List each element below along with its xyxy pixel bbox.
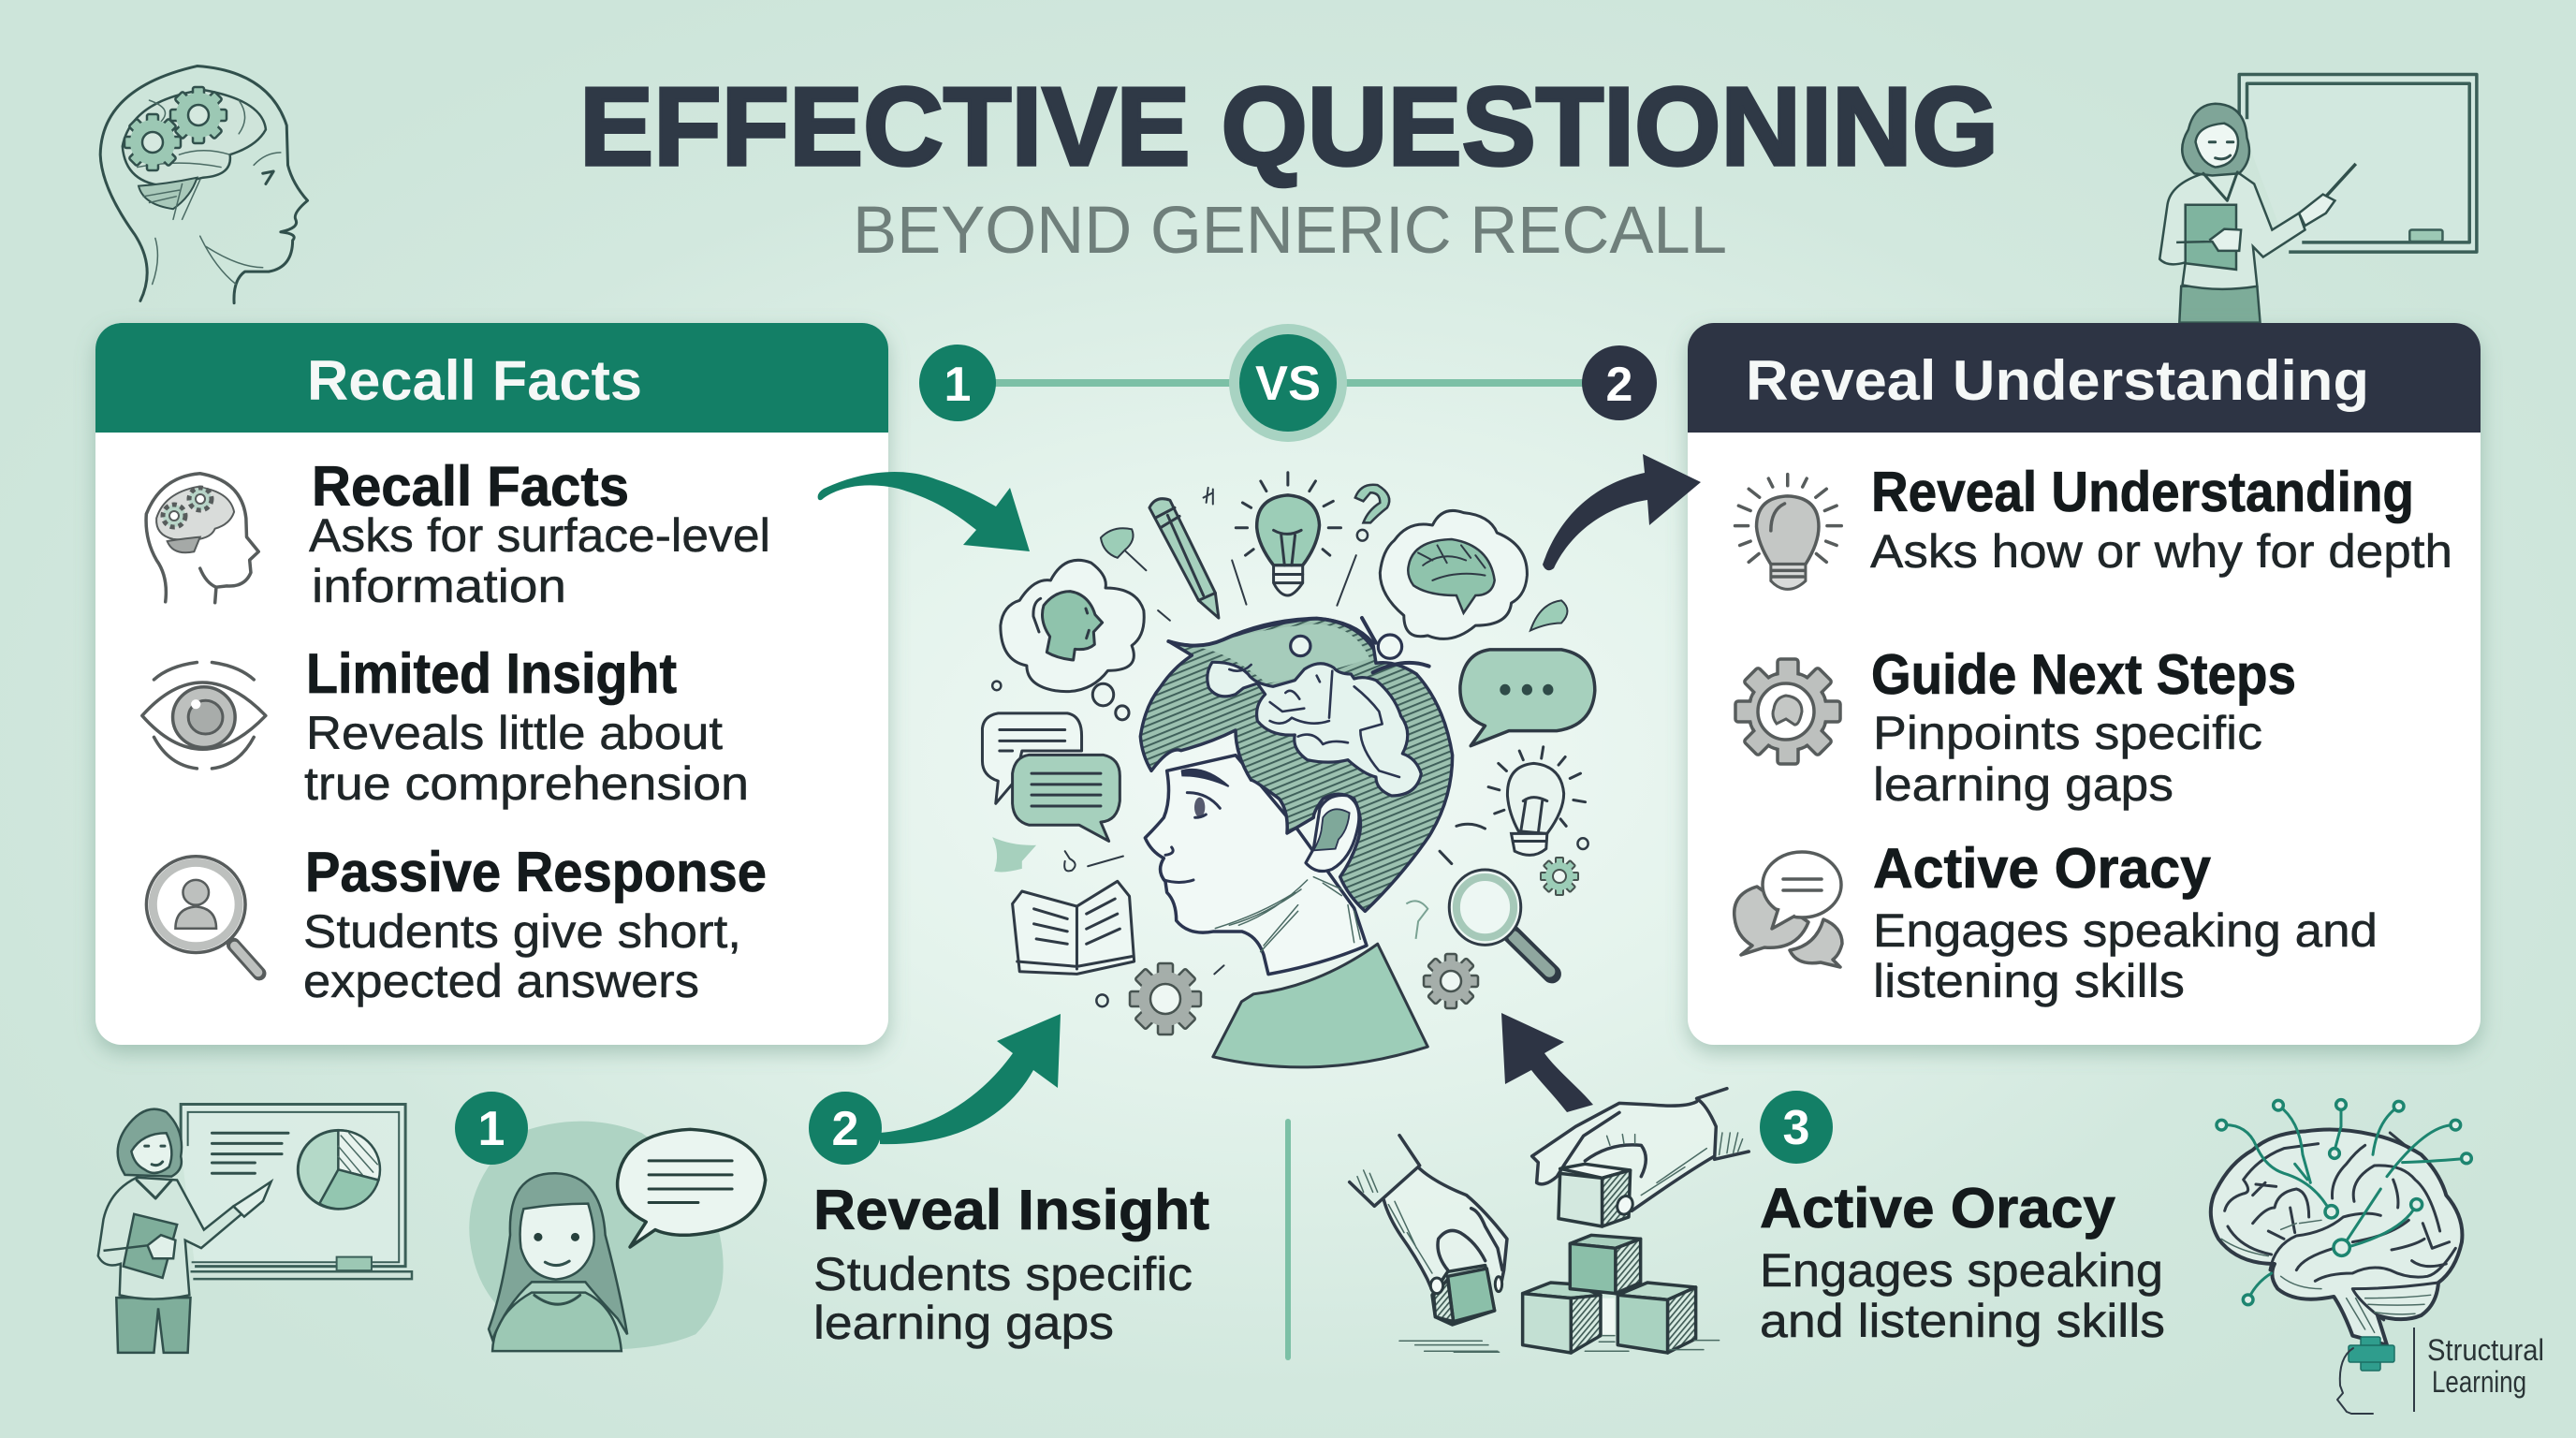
badge 2 — [809, 1092, 882, 1165]
logo mark — [2337, 1337, 2394, 1414]
icon: eye — [142, 662, 266, 769]
item text: Engages speaking and — [1873, 904, 2378, 957]
illustration: brain with circuit nodes — [2211, 1100, 2471, 1345]
text: Students specific — [813, 1248, 1193, 1300]
icon: speech bubbles — [1734, 852, 1842, 967]
icon: magnifier with person — [146, 857, 259, 974]
icon: head silhouette in cloud — [1033, 592, 1103, 660]
item text: information — [312, 560, 566, 612]
illustration: head with brain and gears — [100, 66, 308, 303]
speech bubble with dots — [1460, 650, 1595, 746]
item text — [309, 509, 770, 612]
badge VS: VS — [1255, 357, 1321, 411]
badge 1: 1 — [478, 1102, 505, 1156]
speech bubble — [618, 1129, 766, 1247]
text: Engages speaking — [1760, 1244, 2163, 1297]
item text — [1873, 707, 2262, 811]
item text: expected answers — [303, 955, 699, 1007]
item text: listening skills — [1873, 955, 2185, 1007]
boy: brain — [1208, 662, 1421, 796]
heading: Active Oracy — [1760, 1177, 2116, 1240]
item text: true comprehension — [304, 757, 749, 810]
panel: recall facts — [95, 323, 888, 1045]
item title: Guide Next Steps — [1871, 643, 2296, 706]
logo text — [2427, 1333, 2544, 1399]
boy: eye and details — [1182, 770, 1229, 786]
doodles — [1124, 488, 1356, 621]
badge 1: 1 — [944, 358, 971, 412]
item text: Students give short, — [303, 905, 741, 958]
boy: head — [1140, 618, 1453, 975]
icon: open book — [1013, 881, 1134, 974]
speech bubbles left — [982, 713, 1082, 803]
item text: Pinpoints specific — [1873, 707, 2262, 759]
heading: Reveal Understanding — [1746, 349, 2369, 412]
item: reveal understanding — [1735, 461, 2452, 589]
badge 2 — [1582, 345, 1657, 420]
blob background — [469, 1122, 724, 1350]
card header — [95, 323, 888, 433]
item text — [1873, 904, 2378, 1007]
panel: reveal understanding — [1688, 323, 2481, 1045]
logo text: Learning — [2432, 1365, 2526, 1399]
badge 3: 3 — [1783, 1101, 1809, 1155]
hand right with block — [1532, 1089, 1749, 1226]
text — [813, 1248, 1193, 1349]
badge VS — [1229, 324, 1347, 442]
icon: light bulb top — [1257, 495, 1320, 565]
item: active oracy — [1734, 837, 2378, 1007]
item text — [304, 707, 749, 810]
stacked blocks — [1399, 1235, 1720, 1353]
item text: learning gaps — [1873, 758, 2174, 811]
item text: Asks how or why for depth — [1870, 525, 2452, 578]
block: active oracy — [1760, 1091, 2165, 1347]
illustration: hands stacking blocks — [1350, 1089, 1749, 1353]
text: learning gaps — [813, 1297, 1114, 1349]
item: guide next steps — [1735, 643, 2296, 811]
item: limited insight — [142, 642, 749, 810]
cloud: left — [1001, 560, 1144, 692]
versus connector — [919, 324, 1657, 442]
item title: Reveal Understanding — [1871, 461, 2414, 523]
text: and listening skills — [1760, 1295, 2165, 1347]
card background — [1688, 323, 2481, 1045]
illustration: central student with ideas — [982, 473, 1595, 1067]
boy: ear — [1306, 795, 1359, 872]
title: EFFECTIVE QUESTIONING — [579, 65, 1998, 189]
icon: head with gears — [146, 474, 258, 603]
item text: Reveals little about — [306, 707, 723, 759]
block: reveal insight — [809, 1092, 1209, 1349]
heading: Reveal Insight — [813, 1179, 1209, 1241]
arrow: green from badge 2 into centre — [880, 1014, 1061, 1144]
item title: Passive Response — [305, 841, 767, 903]
gears — [1130, 858, 1578, 1034]
icon: gear — [1735, 659, 1840, 764]
illustration: teacher with pie chart — [98, 1104, 412, 1353]
icon: light bulb — [1735, 475, 1841, 589]
icon: pencil — [1149, 499, 1219, 618]
girl — [489, 1173, 627, 1351]
icon: question mark — [1355, 485, 1389, 522]
item: passive response — [146, 841, 767, 1007]
group: student speaking — [455, 1092, 766, 1351]
hand left — [1350, 1136, 1507, 1325]
heading: Recall Facts — [307, 349, 642, 412]
card background — [95, 323, 888, 1045]
logo: structural learning — [2337, 1328, 2544, 1414]
arrow: green into centre from top-left — [818, 472, 1030, 551]
illustration: teacher at whiteboard — [2159, 74, 2477, 323]
card header — [1688, 323, 2481, 433]
icon: small bulb right — [1507, 763, 1564, 833]
badge 2: 2 — [1606, 358, 1632, 412]
vertical divider — [1285, 1122, 1291, 1357]
text — [1760, 1244, 2165, 1347]
boy: shirt — [1213, 944, 1427, 1067]
badge 1 — [919, 345, 996, 421]
item title: Recall Facts — [312, 455, 629, 518]
logo text: Structural — [2427, 1333, 2544, 1367]
arrow: dark from blocks into centre — [1501, 1013, 1593, 1112]
item title: Limited Insight — [306, 642, 677, 705]
item title: Active Oracy — [1873, 837, 2212, 900]
item: recall facts — [146, 455, 770, 612]
badge 3 — [1760, 1091, 1833, 1164]
cloud: right with brain — [1380, 510, 1527, 638]
arrow: dark out to top-right — [1543, 454, 1701, 570]
item text: Asks for surface-level — [309, 509, 770, 562]
icon: magnifying glass — [1512, 934, 1552, 974]
badge 1 — [455, 1092, 528, 1165]
badge 2: 2 — [832, 1102, 858, 1156]
item text — [303, 905, 741, 1007]
subtitle: BEYOND GENERIC RECALL — [853, 194, 1727, 268]
